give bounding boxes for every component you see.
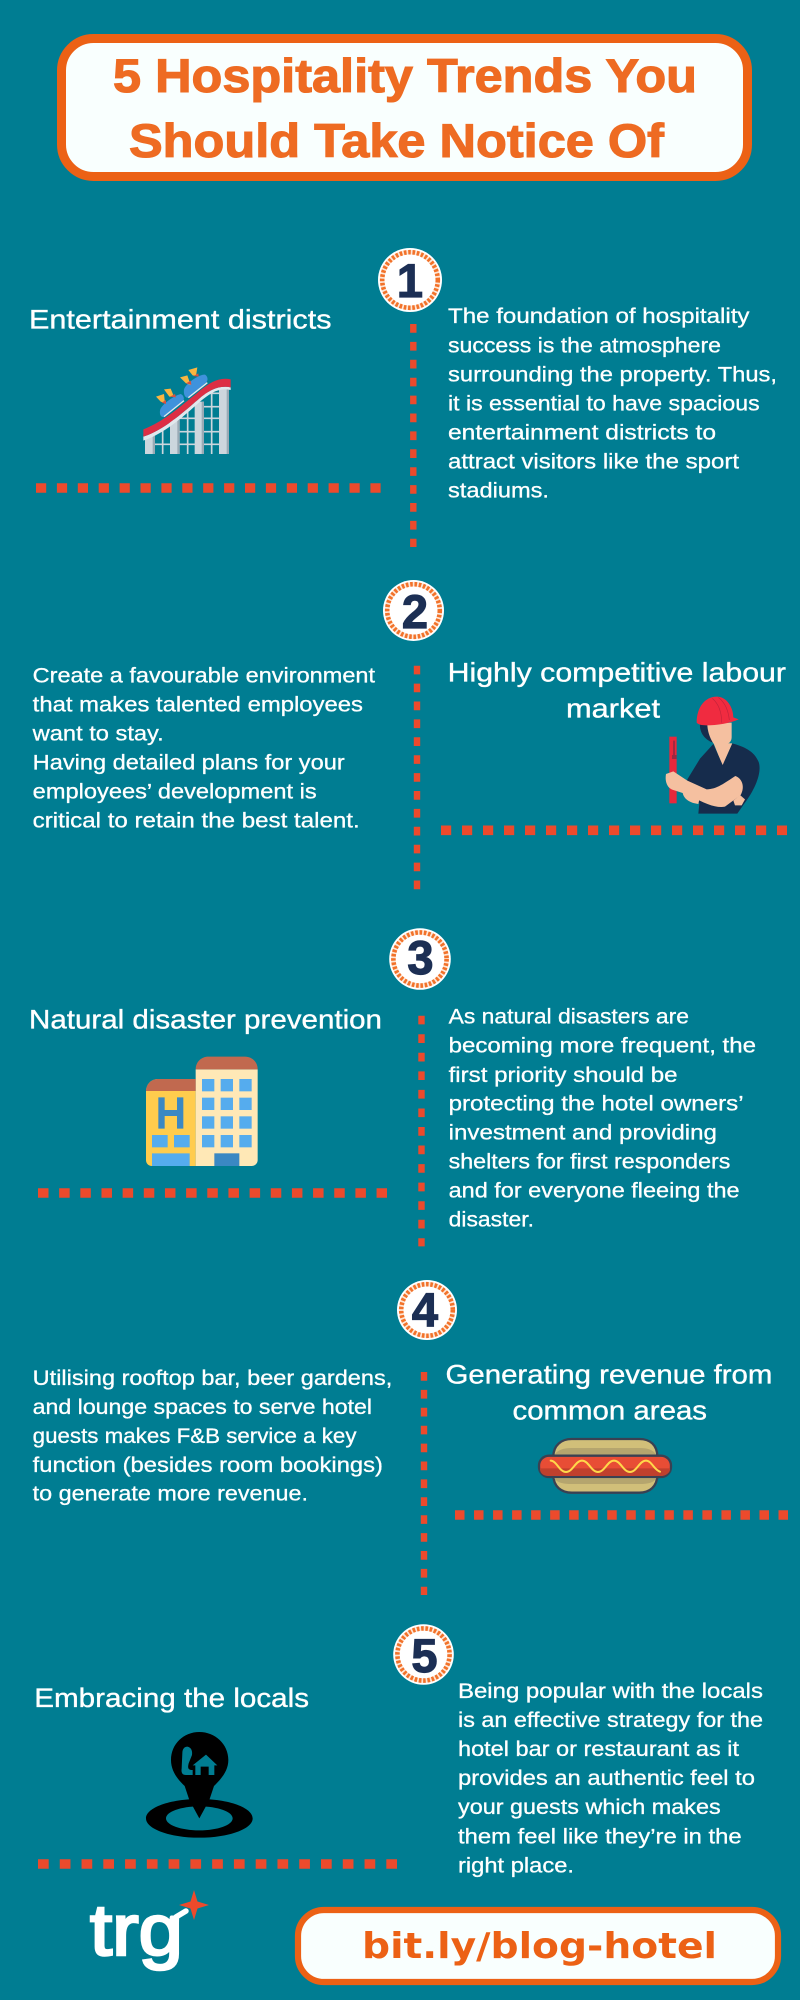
icon: hot dog [539,1439,671,1493]
text block 5: provides an authentic feel to [458,1767,755,1790]
text block 5: is an effective strategy for the [458,1709,763,1732]
number badge 3 [389,928,451,990]
number badge 5 [393,1624,454,1685]
text block 2: that makes talented employees [33,694,363,717]
text block 1: entertainment districts to [448,422,716,445]
divider line 3 [38,1188,387,1198]
number badge 2: 2 [402,585,428,638]
text block 2: Create a favourable environment [33,665,375,688]
text block 1 [448,305,777,502]
heading: natural disaster prevention: Natural disaster prevention [29,1004,382,1034]
text block 2: employees’ development is [33,781,317,804]
number badge 2 [383,580,444,641]
text block 3: becoming more frequent, the [449,1034,756,1058]
text block 5: hotel bar or restaurant as it [458,1738,739,1761]
text block 2 [32,665,375,833]
divider line 5 [38,1859,397,1869]
text block 3: investment and providing [449,1122,717,1145]
title: 5 Hospitality Trends You [113,49,697,102]
number badge 4 [397,1280,457,1340]
icon: roller coaster [143,367,231,454]
text block 1: The foundation of hospitality [448,305,750,328]
divider line 4 [455,1510,788,1520]
divider line 1 [36,483,381,493]
text block 2: want to stay. [32,723,164,746]
text block 4: to generate more revenue. [33,1483,308,1506]
heading: highly competitive labour market: Highly competitive labour [448,658,786,688]
divider line 2 [441,825,787,835]
text block 3: and for everyone fleeing the [449,1180,740,1202]
text block 5: Being popular with the locals [458,1680,763,1703]
title [62,38,748,176]
text block 4: function (besides room bookings) [33,1454,383,1477]
number badge 5: 5 [411,1629,438,1682]
text block 1: it is essential to have spacious [448,393,760,416]
text block 1: surrounding the property. Thus, [448,363,777,386]
logo: trg [90,1890,209,1971]
title: Should Take Notice Of [129,114,664,167]
icon: map pin [146,1732,253,1838]
text block 5 [458,1680,763,1878]
text block 5: your guests which makes [458,1796,721,1819]
icon: worker with level [666,697,760,814]
heading: entertainment districts: Entertainment districts [29,305,332,335]
text block 3: disaster. [449,1208,534,1231]
text block 3: shelters for first responders [449,1151,730,1174]
heading: highly competitive labour market [448,658,786,723]
number badge 3: 3 [407,931,434,984]
text block 3: protecting the hotel owners’ [449,1093,744,1116]
text block 3 [449,1005,756,1231]
heading: highly competitive labour market: market [566,693,661,723]
text block 1: stadiums. [448,480,549,502]
logo: trg: trg [90,1891,183,1971]
text block 2: Having detailed plans for your [33,752,345,775]
text block 3: As natural disasters are [449,1005,689,1028]
text block 4: Utilising rooftop bar, beer gardens, [33,1367,392,1390]
heading: generating revenue from common areas [446,1360,772,1426]
link box: bit.ly/blog-hotel [362,1926,717,1967]
text block 1: success is the atmosphere [448,334,721,358]
text block 5: right place. [458,1854,574,1878]
number badge 1 [378,248,442,312]
text block 3: first priority should be [449,1064,678,1087]
text block 2: critical to retain the best talent. [33,810,360,833]
heading: generating revenue from common areas: common areas [512,1396,707,1426]
text block 4 [33,1367,392,1506]
heading: generating revenue from common areas: Generating revenue from [446,1360,772,1390]
number badge 4: 4 [412,1283,438,1336]
text block 4: guests makes F&B service a key [33,1425,357,1448]
text block 1: attract visitors like the sport [448,451,739,474]
icon: hotel [146,1057,258,1166]
link box [298,1910,778,1982]
number badge 1: 1 [397,254,423,307]
text block 4: and lounge spaces to serve hotel [33,1396,372,1419]
heading: embracing the locals: Embracing the locals [34,1683,309,1713]
text block 5: them feel like they’re in the [458,1825,742,1848]
